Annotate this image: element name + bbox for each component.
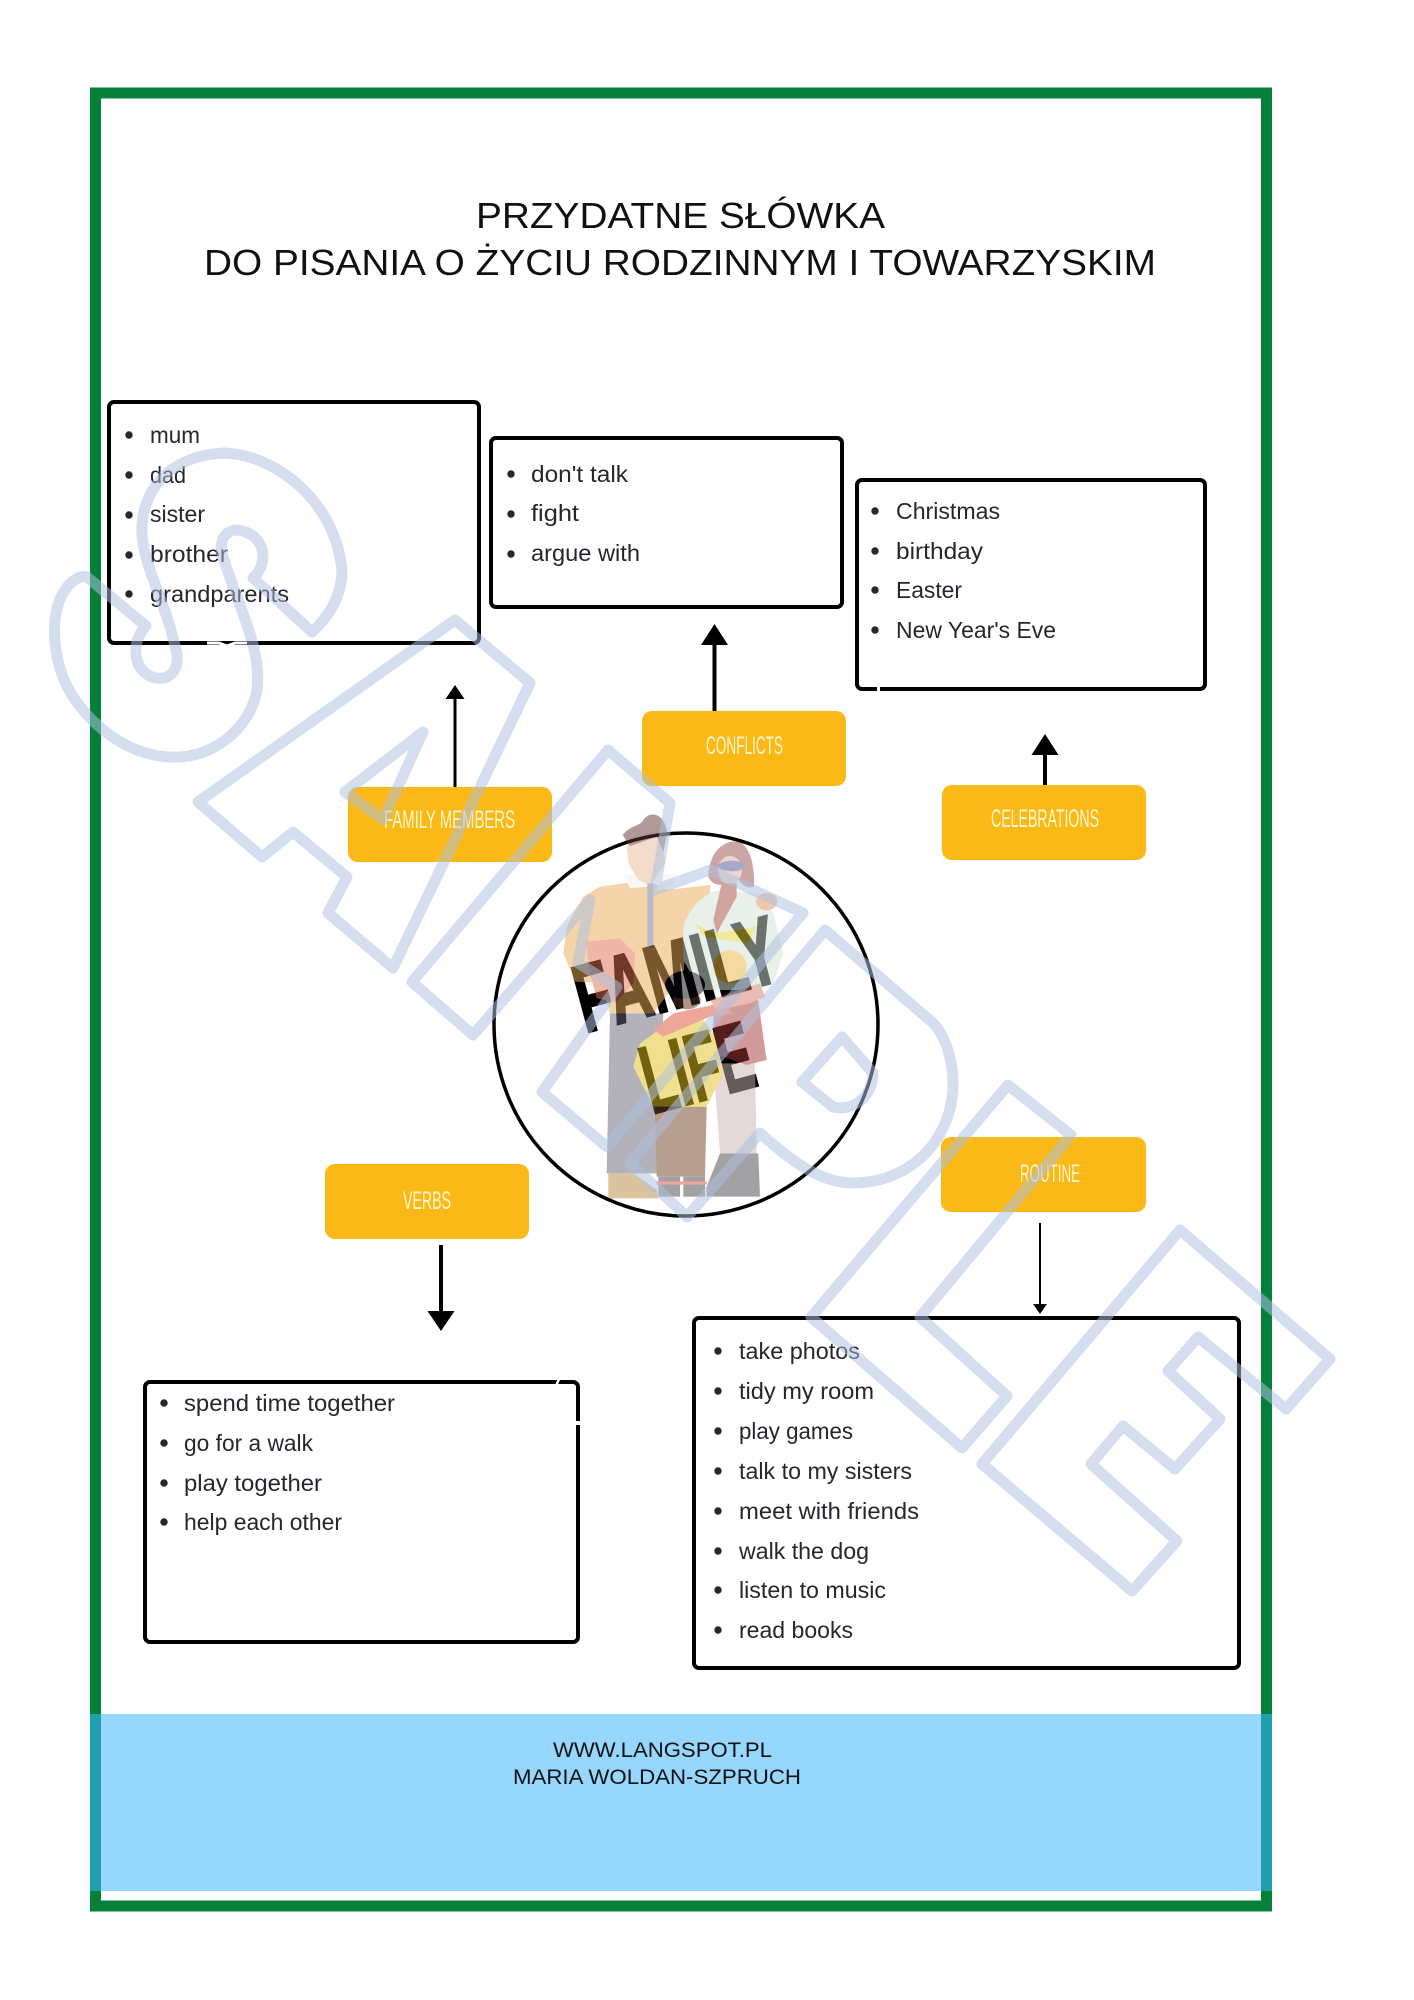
footer text: MARIA WOLDAN-SZPRUCH (513, 1766, 801, 1789)
label: conflicts (642, 711, 846, 786)
panel: routine list: meet with friends (739, 1498, 919, 1524)
panel: family members list: mum (150, 422, 200, 448)
label: routine (941, 1137, 1146, 1212)
label: celebrations (942, 785, 1146, 860)
label: conflicts: CONFLICTS (706, 732, 783, 760)
title: DO PISANIA O ŻYCIU RODZINNYM I TOWARZYSKIM (204, 242, 1156, 283)
panel: verbs list: play together (184, 1470, 322, 1496)
panel: routine list: take photos (739, 1338, 860, 1364)
label: celebrations: CELEBRATIONS (991, 805, 1099, 833)
central circle (494, 833, 878, 1216)
label: verbs (325, 1164, 529, 1239)
title (204, 195, 1156, 283)
panel: celebrations list: New Year's Eve (896, 617, 1056, 643)
arrow: celebrations up (1032, 734, 1058, 786)
footer band (90, 1714, 1272, 1891)
panel: conflicts list: argue with (531, 540, 640, 566)
panel: celebrations list: Christmas (896, 498, 1000, 524)
panel: celebrations list (857, 480, 1205, 693)
central heading: family life: LIFE (630, 1002, 766, 1134)
panel: routine list: read books (739, 1617, 853, 1643)
central heading: family life (563, 896, 790, 1134)
arrow: verbs down (428, 1245, 454, 1331)
panel: routine list: tidy my room (739, 1378, 874, 1404)
label: family members: FAMILY MEMBERS (384, 806, 515, 834)
panel: celebrations list: Easter (896, 577, 962, 603)
panel: verbs list: help each other (184, 1509, 342, 1535)
footer text: WWW.LANGSPOT.PL (553, 1739, 772, 1762)
label: family members (348, 787, 552, 862)
panel: family members list: sister (150, 501, 205, 527)
central heading: family life: FAMILY (563, 896, 790, 1053)
panel: routine list (694, 1318, 1239, 1668)
panel: routine list: listen to music (739, 1577, 886, 1603)
panel: family members list: grandparents (150, 581, 289, 607)
panel: verbs list: spend time together (184, 1390, 395, 1416)
panel: celebrations list: birthday (896, 538, 984, 564)
panel: routine list: play games (739, 1418, 853, 1444)
arrow: conflicts up (701, 624, 728, 712)
arrow: routine down (1033, 1223, 1047, 1314)
panel: conflicts list: fight (531, 500, 580, 526)
panel: routine list: talk to my sisters (739, 1458, 912, 1484)
panel: conflicts list: don't talk (531, 461, 629, 487)
panel: family members list (109, 402, 479, 646)
illustration: family of four (563, 815, 783, 1198)
panel: conflicts list (491, 438, 842, 607)
panel: verbs list (145, 1379, 580, 1642)
panel: family members list: brother (150, 541, 228, 567)
title: PRZYDATNE SŁÓWKA (476, 195, 885, 236)
label: verbs: VERBS (403, 1187, 451, 1215)
arrow: family members up (446, 685, 464, 788)
panel: verbs list: go for a walk (184, 1430, 313, 1456)
footer text (513, 1739, 801, 1789)
panel: family members list: dad (150, 462, 186, 488)
watermark logo outlines (55, 453, 1330, 1591)
green page frame (96, 93, 1266, 1906)
panel: routine list: walk the dog (738, 1538, 869, 1564)
label: routine: ROUTINE (1020, 1160, 1080, 1188)
